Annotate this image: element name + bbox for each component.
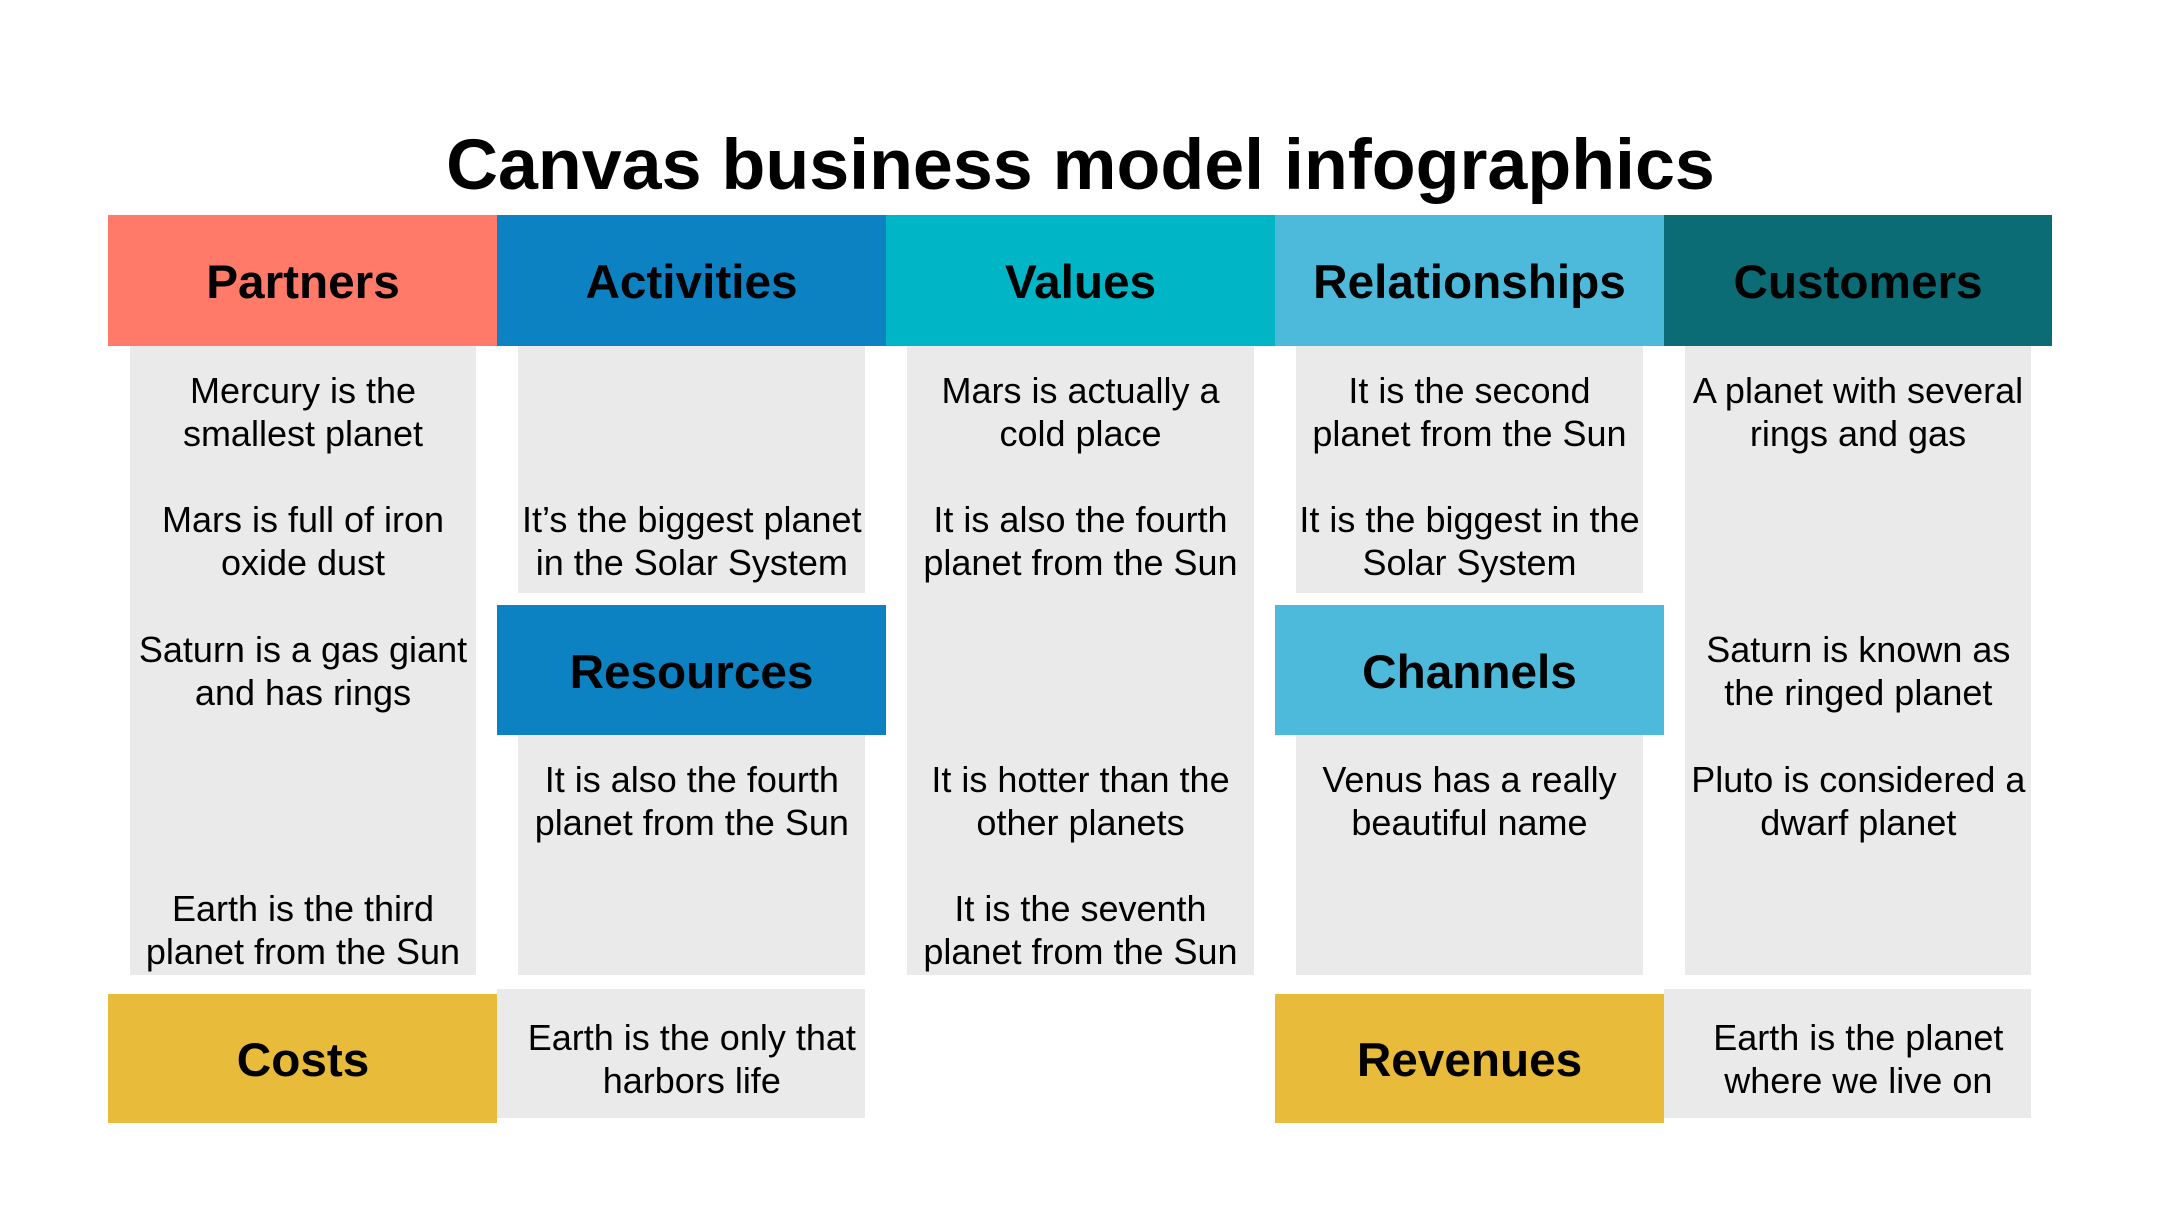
header: resources <box>497 605 886 735</box>
text: values item 1: Mars is actually a <box>941 370 1221 411</box>
text: relationships item 1: It is the second <box>1348 370 1591 411</box>
header: relationships: Relationships <box>1313 256 1626 309</box>
header: activities <box>497 215 886 346</box>
text: resources item: planet from the Sun <box>535 802 849 843</box>
panel: resources content <box>518 735 865 975</box>
text: partners item 2: oxide dust <box>221 542 385 583</box>
text: values item 3: It is hotter than the <box>931 759 1230 800</box>
text: resources item: It is also the fourth <box>545 759 839 800</box>
header: channels <box>1275 605 1664 735</box>
panel: revenues content: Earth is the planet <box>1713 1017 2003 1058</box>
text: values item 4: planet from the Sun <box>923 931 1238 972</box>
panel: values content <box>907 346 1254 975</box>
text: activities item: in the Solar System <box>536 542 848 583</box>
header: revenues: Revenues <box>1357 1034 1582 1087</box>
header: partners: Partners <box>206 256 400 309</box>
text: channels item: Venus has a really <box>1322 759 1617 800</box>
text: customers item 1: rings and gas <box>1750 413 1966 454</box>
panel: customers content <box>1685 346 2031 975</box>
panel: activities content <box>518 346 865 593</box>
header: customers: Customers <box>1733 256 1983 309</box>
text: partners item 3: and has rings <box>195 672 411 713</box>
header: revenues <box>1275 994 1664 1123</box>
text: relationships item 1: planet from the Sun <box>1312 413 1627 454</box>
text: partners item 2: Mars is full of iron <box>162 499 444 540</box>
text: partners item 1: Mercury is the <box>190 370 416 411</box>
text: relationships item 2: It is the biggest in the <box>1299 499 1640 540</box>
panel: costs content: Earth is the only that <box>528 1017 856 1058</box>
text: partners item 1: smallest planet <box>183 413 423 454</box>
panel: costs content <box>497 989 865 1118</box>
panel: relationships content <box>1296 346 1643 593</box>
text: values item 2: It is also the fourth <box>933 499 1228 540</box>
text: customers item 1: A planet with several <box>1693 370 2023 411</box>
header: relationships <box>1275 215 1664 346</box>
text: customers item 3: dwarf planet <box>1760 802 1956 843</box>
text: customers item 3: Pluto is considered a <box>1691 759 2026 800</box>
text: customers item 2: the ringed planet <box>1724 672 1992 713</box>
title: Canvas business model infographics <box>446 125 1715 205</box>
text: relationships item 2: Solar System <box>1362 542 1577 583</box>
panel: partners content <box>130 346 476 975</box>
text: partners item 4: Earth is the third <box>172 888 434 929</box>
text: values item 4: It is the seventh <box>954 888 1207 929</box>
header: activities: Activities <box>585 256 798 309</box>
text: values item 2: planet from the Sun <box>923 542 1238 583</box>
text: partners item 3: Saturn is a gas giant <box>139 629 467 670</box>
header: channels: Channels <box>1362 646 1577 699</box>
header: costs <box>108 994 497 1123</box>
text: values item 1: cold place <box>999 413 1162 454</box>
header: values: Values <box>1005 256 1156 309</box>
header: values <box>886 215 1275 346</box>
header: customers <box>1664 215 2052 346</box>
panel: revenues content: where we live on <box>1723 1060 1992 1101</box>
panel: costs content: harbors life <box>603 1060 781 1101</box>
text: channels item: beautiful name <box>1351 802 1588 843</box>
panel: channels content <box>1296 735 1643 975</box>
text: values item 3: other planets <box>976 802 1185 843</box>
panel: revenues content <box>1664 989 2031 1118</box>
text: activities item: It’s the biggest planet <box>522 499 862 540</box>
text: partners item 4: planet from the Sun <box>146 931 460 972</box>
text: customers item 2: Saturn is known as <box>1706 629 2010 670</box>
header: resources: Resources <box>570 646 813 699</box>
header: partners <box>108 215 497 346</box>
header: costs: Costs <box>237 1034 369 1087</box>
